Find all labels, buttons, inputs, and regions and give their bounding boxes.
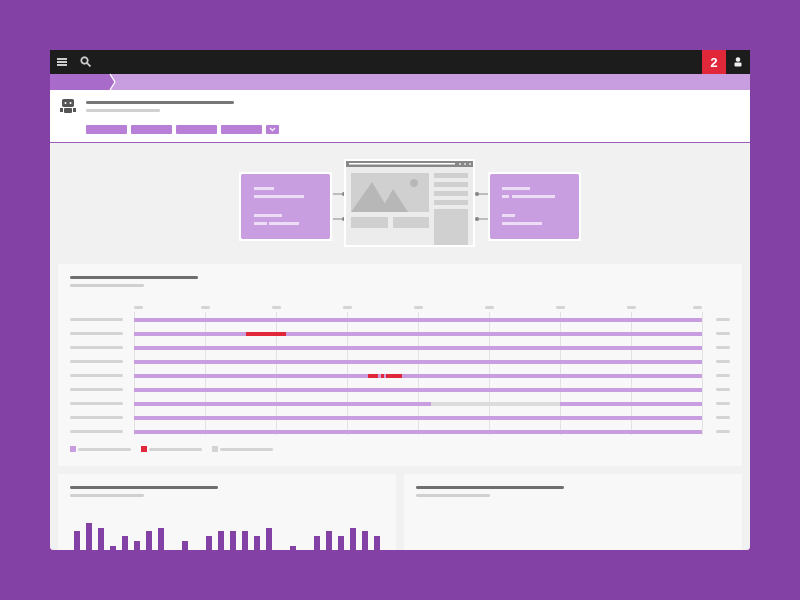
notification badge (702, 50, 726, 74)
connectors (333, 192, 488, 220)
panel: bar chart (58, 474, 396, 554)
icon: search (81, 57, 90, 66)
panel: gantt timeline (58, 264, 742, 466)
icon: menu (57, 58, 67, 66)
header (50, 90, 750, 143)
browser mockup (344, 159, 475, 247)
icon: robot (60, 99, 76, 113)
icon: user (734, 57, 742, 66)
breadcrumb (50, 74, 750, 90)
legend (70, 446, 273, 452)
top bar (50, 50, 750, 74)
panel: right chart (404, 474, 742, 554)
app window (50, 50, 750, 554)
diagram (239, 159, 581, 247)
header title (86, 101, 234, 104)
tabs (86, 125, 279, 134)
right card (488, 172, 581, 241)
notification badge: 2 (710, 55, 718, 70)
left card (239, 172, 332, 241)
